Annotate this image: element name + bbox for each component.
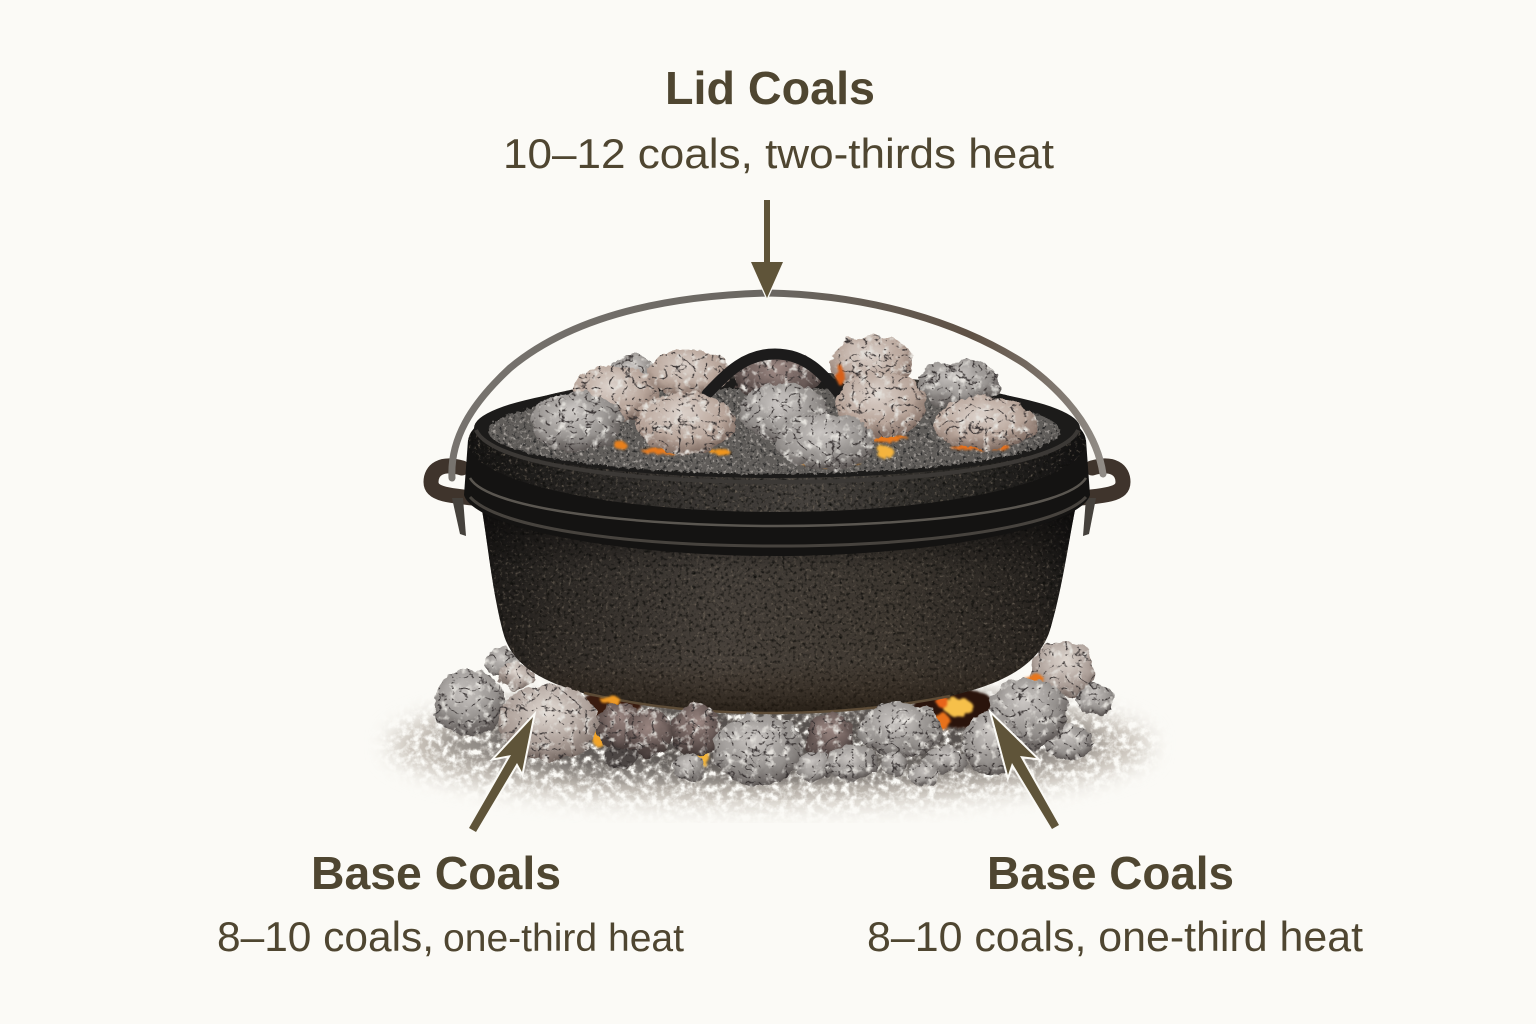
pot bottom lip: [584, 693, 950, 713]
label: right base coals: [867, 847, 1363, 960]
pot rim and lid underside: [464, 440, 1090, 556]
pot body: [482, 510, 1075, 713]
lid raised rim: [474, 378, 1080, 478]
lid coals: [530, 335, 1037, 470]
heading: lid coals: Lid Coals: [665, 62, 875, 114]
rear lid coals: [572, 335, 1000, 423]
side lug: left: [431, 466, 495, 536]
lid handle: [707, 354, 841, 396]
label: left base coals: [217, 847, 684, 960]
description: left base coals: one-third heat: [443, 917, 684, 960]
description: lid coals: 10–12 coals, two-thirds heat: [503, 130, 1054, 177]
rear base coals: [486, 642, 1113, 760]
arrow: left base coals: [469, 717, 533, 832]
side lug: right: [1058, 466, 1123, 536]
label: lid coals: [503, 62, 1054, 177]
arrow: lid coals: [751, 200, 783, 298]
front base coals and embers: [433, 670, 1068, 786]
description: left base coals: 8–10 coals,: [217, 913, 434, 960]
pot body shading: [482, 510, 1075, 713]
ash layer on lid: [488, 388, 1060, 474]
arrow: right base coals: [992, 715, 1059, 829]
base embers: [591, 696, 950, 765]
heading: right base coals: Base Coals: [987, 847, 1234, 899]
bail handle: [452, 293, 1103, 478]
front lid coals: [530, 372, 1037, 470]
lid ember glow: [614, 365, 1010, 466]
base coals: [433, 670, 1068, 786]
lid dome band: [468, 372, 1086, 512]
lid flange highlight: [470, 478, 1086, 526]
dutch oven: [431, 372, 1123, 713]
heading: left base coals: Base Coals: [311, 847, 561, 899]
ash bed under pot: [390, 685, 1150, 805]
description: left base coals: [217, 913, 684, 960]
pot rim highlight: [470, 497, 1086, 546]
description: right base coals: 8–10 coals, one-third heat: [867, 913, 1363, 960]
embers behind pot base: [580, 674, 1044, 728]
